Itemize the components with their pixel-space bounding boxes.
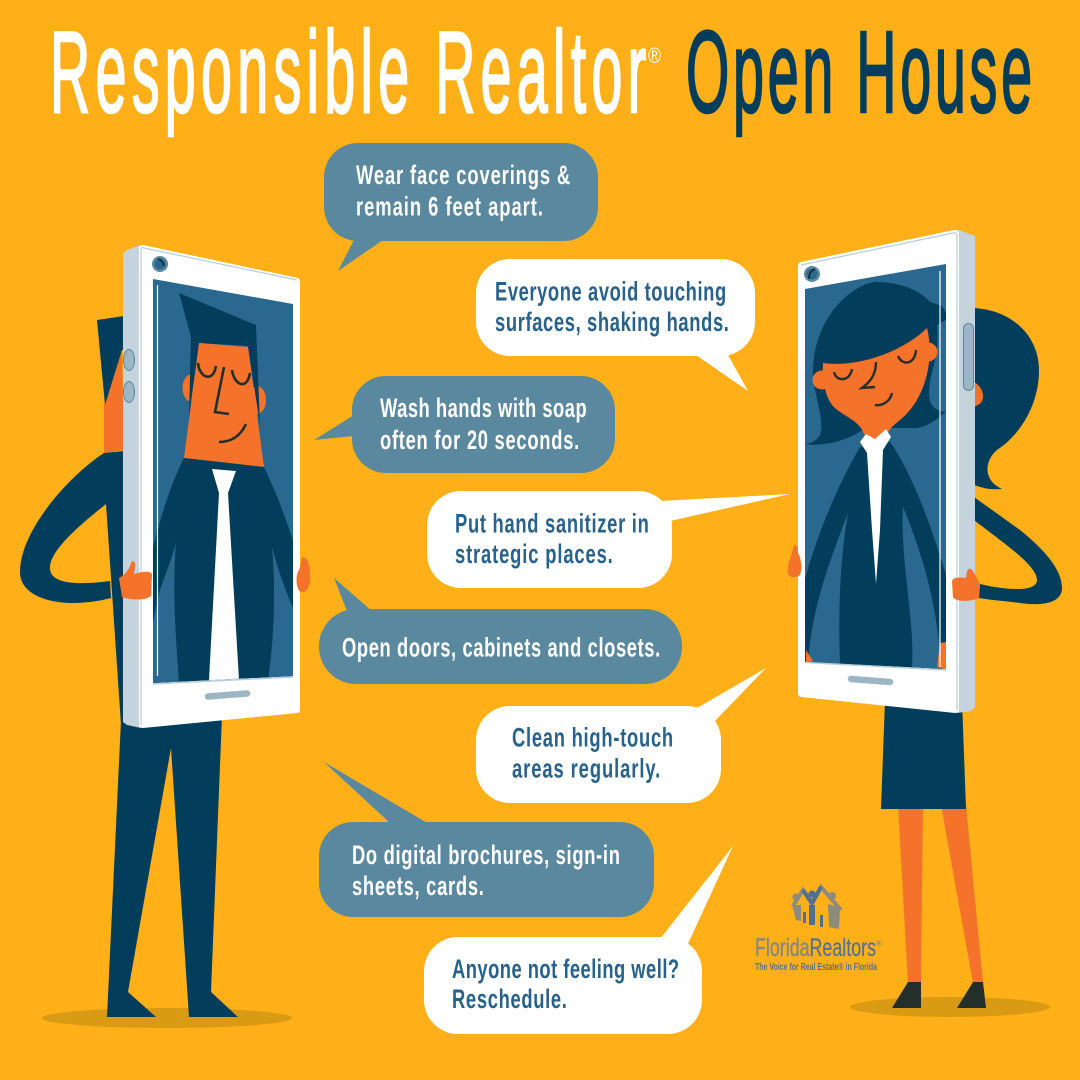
phone rim [801, 233, 957, 710]
man left hand [119, 561, 152, 600]
bubble: avoid touching: surfaces, shaking hands. [495, 306, 729, 337]
woman collar and tie [860, 429, 891, 584]
bubble: clean high-touch: areas regularly. [512, 753, 660, 783]
screen bottom edge [153, 677, 293, 684]
home button [851, 679, 890, 682]
man legs [107, 715, 238, 1017]
bubble: open doors: Open doors, cabinets and closets. [342, 632, 660, 662]
man facial features [198, 363, 250, 442]
man torso and arm [20, 451, 124, 725]
ears [182, 374, 266, 414]
phone front [139, 245, 300, 728]
woman legs [898, 805, 983, 983]
bubble: digital brochures: sheets, cards. [352, 870, 484, 901]
man screen [150, 275, 296, 690]
bubble: avoid touching: Everyone avoid touching [495, 276, 726, 306]
screen glare line [156, 285, 158, 676]
bubble: reschedule [424, 846, 733, 1034]
ears [812, 342, 938, 390]
bubble: wash hands [314, 376, 615, 473]
woman phone [798, 230, 975, 713]
woman hair [803, 282, 949, 445]
home button [208, 694, 247, 696]
title: ® [648, 43, 661, 68]
phone side [955, 230, 975, 713]
bubble: face coverings: remain 6 feet apart. [356, 191, 543, 221]
title [50, 9, 1032, 137]
bubble: hand sanitizer [427, 491, 790, 588]
woman jacket [802, 442, 949, 672]
bubble: clean high-touch [476, 668, 766, 803]
camera [152, 256, 168, 272]
woman screen [802, 260, 949, 672]
bubble: reschedule: Reschedule. [452, 983, 567, 1014]
screen glare line [939, 271, 941, 667]
woman shoes [892, 982, 986, 1008]
logo registered mark: ® [876, 939, 882, 948]
woman facial features [834, 350, 916, 405]
man right fingers [297, 557, 310, 592]
screen bottom edge [805, 662, 946, 670]
bubble: wash hands: Wash hands with soap [380, 392, 587, 423]
bubble: hand sanitizer: Put hand sanitizer in [455, 508, 649, 538]
bubble: avoid touching [476, 259, 755, 391]
bubble: clean high-touch: Clean high-touch [512, 722, 673, 752]
bubble: wash hands: often for 20 seconds. [380, 424, 579, 455]
title: Responsible Realtor [50, 9, 646, 137]
logo: Florida Realtors [755, 887, 882, 973]
bubble: reschedule: Anyone not feeling well? [452, 953, 679, 984]
phone front [798, 230, 959, 713]
woman ponytail [970, 308, 1039, 489]
screen background [150, 275, 296, 687]
hair highlight [928, 320, 946, 412]
side buttons [124, 350, 134, 402]
bubble: hand sanitizer: strategic places. [455, 538, 613, 569]
camera [804, 266, 820, 282]
title: Open House [686, 9, 1032, 137]
side button [964, 324, 974, 390]
man back hair [97, 316, 124, 405]
ground shadow: woman [850, 997, 1050, 1017]
woman back ear [974, 382, 983, 407]
screen background [802, 260, 949, 672]
woman left fingers [788, 545, 801, 577]
man tie [209, 469, 239, 680]
hands behind screen [806, 642, 947, 670]
phone side [123, 245, 141, 728]
man face [184, 343, 264, 467]
man back of head [104, 350, 124, 453]
man jacket [150, 458, 296, 690]
bubble: face coverings [324, 143, 598, 271]
woman figure [788, 230, 1062, 1017]
jacket folds [153, 543, 296, 684]
bubble: digital brochures [319, 762, 654, 917]
bubble: open doors [319, 578, 682, 684]
man figure [20, 245, 310, 1028]
bubble: face coverings: Wear face coverings & [356, 159, 570, 190]
logo wordmark: FloridaRealtors [755, 934, 876, 962]
logo people icon [792, 887, 841, 929]
logo tagline: The Voice for Real Estate® in Florida [755, 962, 877, 973]
woman hand [952, 569, 980, 601]
phone rim [141, 248, 297, 725]
man phone [123, 245, 300, 728]
jacket folds [809, 507, 941, 668]
woman arm [974, 497, 1062, 604]
ground shadow: man [42, 1008, 292, 1028]
woman skirt [881, 700, 966, 809]
woman face [823, 328, 930, 441]
man hair [179, 293, 260, 425]
bubble: digital brochures: Do digital brochures, sign-in [352, 839, 620, 870]
